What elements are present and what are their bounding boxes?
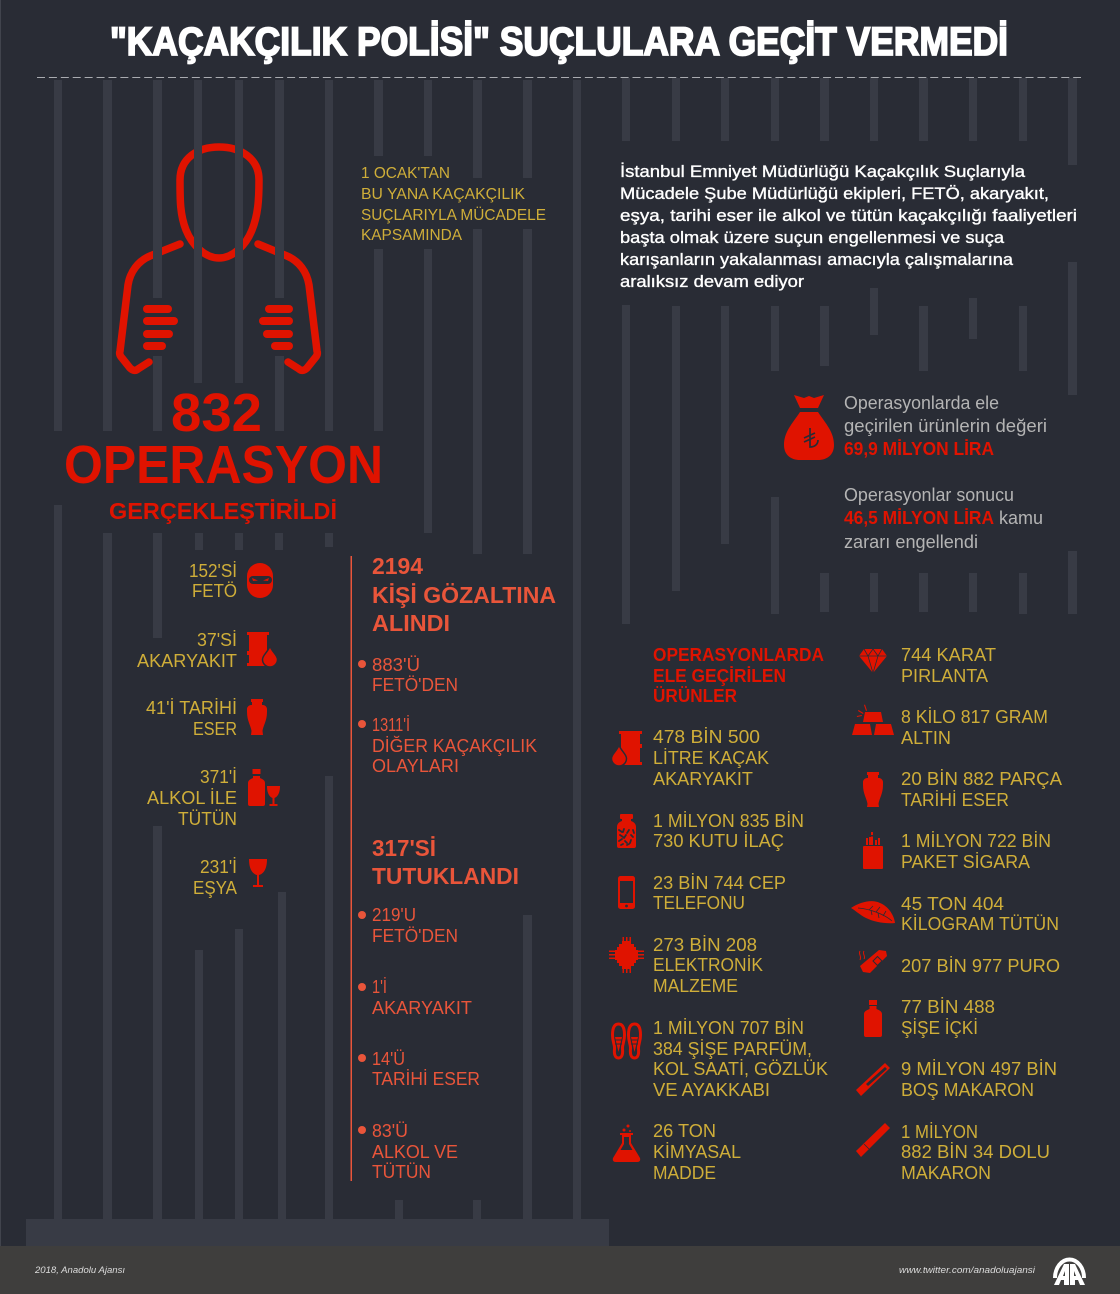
seized goods list, column two: 9 MİLYON 497 BİN: [901, 1059, 1057, 1079]
operation breakdown list: 41'İ TARİHİ: [146, 698, 237, 718]
stat: seized value: [844, 393, 1047, 459]
intro paragraph: eşya, tarihi eser ile alkol ve tütün kaçakçılığı faaliyetleri: [620, 206, 1077, 225]
seized goods list, column two: 1 MİLYON: [901, 1122, 978, 1142]
seized goods list, column one: [653, 727, 828, 1183]
seized goods list, column two: 1 MİLYON 722 BİN: [901, 831, 1051, 851]
seized goods list, column two: TARİHİ ESER: [901, 790, 1009, 810]
arrested breakdown: TÜTÜN: [372, 1162, 431, 1182]
operation breakdown list: EŞYA: [193, 878, 237, 898]
seized goods list, column one: ELEKTRONİK: [653, 955, 763, 975]
seized goods list, column one: AKARYAKIT: [653, 769, 753, 789]
stat: prevented public loss: 46,5 MİLYON LİRA: [844, 508, 994, 528]
arrested breakdown: ALKOL VE: [372, 1142, 458, 1162]
icon: fuel barrel, left: [247, 632, 278, 667]
seized goods list, column one: MALZEME: [653, 976, 738, 996]
intro paragraph: aralıksız devam ediyor: [620, 272, 804, 291]
icon: pair of shoes: [612, 1024, 640, 1058]
intro paragraph: karışanların yakalanması amacıyla çalışmalarına: [620, 250, 1014, 269]
detained heading: 2194: [372, 553, 423, 579]
icon: filled cigarette tube: [856, 1123, 890, 1157]
footer credit: 2018, Anadolu Ajansı: [34, 1265, 125, 1276]
seized goods list, column two: 744 KARAT: [901, 645, 996, 665]
detained breakdown: OLAYLARI: [372, 756, 459, 776]
seized goods heading: [653, 645, 824, 706]
detained breakdown: DİĞER KAÇAKÇILIK: [372, 735, 537, 756]
seized goods list, column two: 8 KİLO 817 GRAM: [901, 707, 1048, 727]
seized goods list, column two: PIRLANTA: [901, 666, 988, 686]
intro note: since January 1: 1 OCAK'TAN: [361, 165, 450, 182]
icon: microchip: [609, 937, 644, 973]
seized goods heading: ÜRÜNLER: [653, 686, 737, 706]
intro paragraph: [620, 162, 1077, 291]
intro paragraph: başta olmak üzere suçun engellenmesi ve suça: [620, 228, 1005, 247]
arrested heading: 317'Sİ: [372, 835, 436, 861]
seized goods list, column two: 20 BİN 882 PARÇA: [901, 769, 1062, 789]
operation breakdown list: [137, 561, 237, 898]
arrested heading: TUTUKLANDI: [372, 863, 519, 889]
headline: 832 operations: 832: [171, 383, 262, 443]
icon: money bag: [784, 395, 834, 460]
intro note: since January 1: BU YANA KAÇAKÇILIK: [361, 186, 525, 203]
seized goods list, column one: 1 MİLYON 835 BİN: [653, 811, 804, 831]
operation breakdown list: TÜTÜN: [178, 809, 237, 829]
icon: vase, right: [863, 772, 883, 807]
detained breakdown: 1311'İ: [372, 715, 410, 735]
detained heading: KİŞİ GÖZALTINA: [372, 582, 556, 608]
intro note: since January 1: SUÇLARIYLA MÜCADELE: [361, 206, 546, 224]
seized goods list, column one: 26 TON: [653, 1121, 716, 1141]
arrested heading: [372, 835, 519, 889]
detained breakdown: 883'Ü: [372, 655, 420, 675]
icon: masked face: [247, 563, 273, 598]
seized goods list, column one: KİMYASAL: [653, 1142, 741, 1162]
stat: prevented public loss: zararı engellendi: [844, 532, 978, 552]
arrested breakdown: TARİHİ ESER: [372, 1069, 480, 1089]
seized goods list, column two: ALTIN: [901, 728, 951, 748]
headline: 832 operations: GERÇEKLEŞTİRİLDİ: [109, 498, 337, 524]
seized goods list, column one: 273 BİN 208: [653, 935, 757, 955]
operation breakdown list: 371'İ: [200, 767, 237, 787]
seized goods list, column two: 207 BİN 977 PURO: [901, 956, 1060, 976]
icon: mobile phone: [618, 876, 635, 909]
seized goods list, column two: PAKET SİGARA: [901, 852, 1030, 872]
operation breakdown list: 152'Sİ: [189, 561, 237, 581]
stat: prevented public loss: kamu: [999, 508, 1043, 528]
footer link: www.twitter.com/anadoluajansi: [899, 1265, 1036, 1276]
title: "KAÇAKÇILIK POLİSİ" SUÇLULARA GEÇİT VERMEDİ: [110, 20, 1008, 64]
divider line: [350, 556, 352, 1181]
seized goods list, column two: ŞİŞE İÇKİ: [901, 1018, 978, 1038]
seized goods heading: OPERASYONLARDA: [653, 645, 824, 665]
seized goods list, column one: 384 ŞİŞE PARFÜM,: [653, 1039, 812, 1059]
icon: fuel barrel, right: [612, 731, 642, 766]
detained heading: ALINDI: [372, 610, 450, 636]
icon: chemistry flask: [613, 1124, 640, 1162]
seized goods list, column one: VE AYAKKABI: [653, 1080, 770, 1100]
operation breakdown list: 37'Sİ: [197, 630, 237, 650]
arrested breakdown: 83'Ü: [372, 1121, 408, 1141]
prisoner figure: [120, 147, 317, 370]
detained breakdown: [358, 655, 537, 776]
seized goods list, column one: MADDE: [653, 1163, 716, 1183]
intro paragraph: Mücadele Şube Müdürlüğü ekipleri, FETÖ, akaryakıt,: [620, 184, 1049, 203]
seized goods list, column one: KOL SAATİ, GÖZLÜK: [653, 1059, 828, 1079]
seized goods list, column one: 478 BİN 500: [653, 727, 760, 747]
icon: cigarette pack: [863, 832, 883, 869]
seized goods list, column two: KİLOGRAM TÜTÜN: [901, 914, 1059, 934]
operation breakdown list: 231'İ: [200, 857, 237, 877]
operation breakdown list: ESER: [193, 719, 237, 739]
arrested breakdown: FETÖ'DEN: [372, 926, 458, 946]
detained heading: [372, 553, 556, 636]
stat: prevented public loss: Operasyonlar sonucu: [844, 485, 1014, 505]
stat: seized value: geçirilen ürünlerin değeri: [844, 416, 1047, 436]
icon: gold bars: [852, 704, 894, 735]
stat: seized value: Operasyonlarda ele: [844, 393, 999, 413]
arrested breakdown: AKARYAKIT: [372, 998, 472, 1018]
icon: bottle: [864, 1000, 882, 1037]
seized goods list, column one: 23 BİN 744 CEP: [653, 873, 786, 893]
seized goods list, column one: TELEFONU: [653, 893, 745, 913]
intro paragraph: İstanbul Emniyet Müdürlüğü Kaçakçılık Suçlarıyla: [620, 162, 1026, 181]
icon: bottle and glass: [248, 769, 280, 806]
arrested breakdown: 14'Ü: [372, 1049, 405, 1069]
icon: diamond: [859, 649, 887, 673]
footer band: [0, 1246, 1120, 1294]
headline: 832 operations: [64, 383, 383, 524]
icon: empty cigarette tube: [856, 1063, 890, 1096]
seized goods list, column one: LİTRE KAÇAK: [653, 748, 769, 768]
intro note: since January 1: KAPSAMINDA: [361, 227, 462, 244]
seized goods list, column two: 77 BİN 488: [901, 997, 995, 1017]
operation breakdown list: FETÖ: [192, 581, 237, 601]
logo: Anadolu Agency: [1054, 1260, 1085, 1285]
detained breakdown: FETÖ'DEN: [372, 675, 458, 695]
icon: pill jar: [617, 814, 636, 848]
icon: vase, left: [247, 699, 267, 735]
icon: wine glass: [249, 859, 267, 887]
arrested breakdown: [358, 905, 480, 1182]
stat: prevented public loss: [844, 485, 1043, 552]
seized goods list, column one: 730 KUTU İLAÇ: [653, 831, 784, 851]
arrested breakdown: 219'U: [372, 905, 416, 925]
seized goods list, column two: BOŞ MAKARON: [901, 1080, 1034, 1100]
seized goods list, column two: [901, 645, 1062, 1183]
seized goods list, column two: MAKARON: [901, 1163, 991, 1183]
operation breakdown list: AKARYAKIT: [137, 651, 237, 671]
icon: tobacco leaf: [851, 901, 895, 923]
stat: seized value: 69,9 MİLYON LİRA: [844, 439, 994, 459]
seized goods list, column one: 1 MİLYON 707 BİN: [653, 1018, 804, 1038]
arrested breakdown: 1'İ: [372, 977, 387, 997]
seized goods heading: ELE GEÇİRİLEN: [653, 666, 786, 686]
operation breakdown list: ALKOL İLE: [147, 788, 237, 808]
seized goods list, column two: 45 TON 404: [901, 894, 1004, 914]
seized goods list, column two: 882 BİN 34 DOLU: [901, 1142, 1050, 1162]
icon: cigar: [859, 950, 887, 973]
headline: 832 operations: OPERASYON: [64, 435, 383, 495]
intro note: since January 1: [361, 165, 546, 244]
